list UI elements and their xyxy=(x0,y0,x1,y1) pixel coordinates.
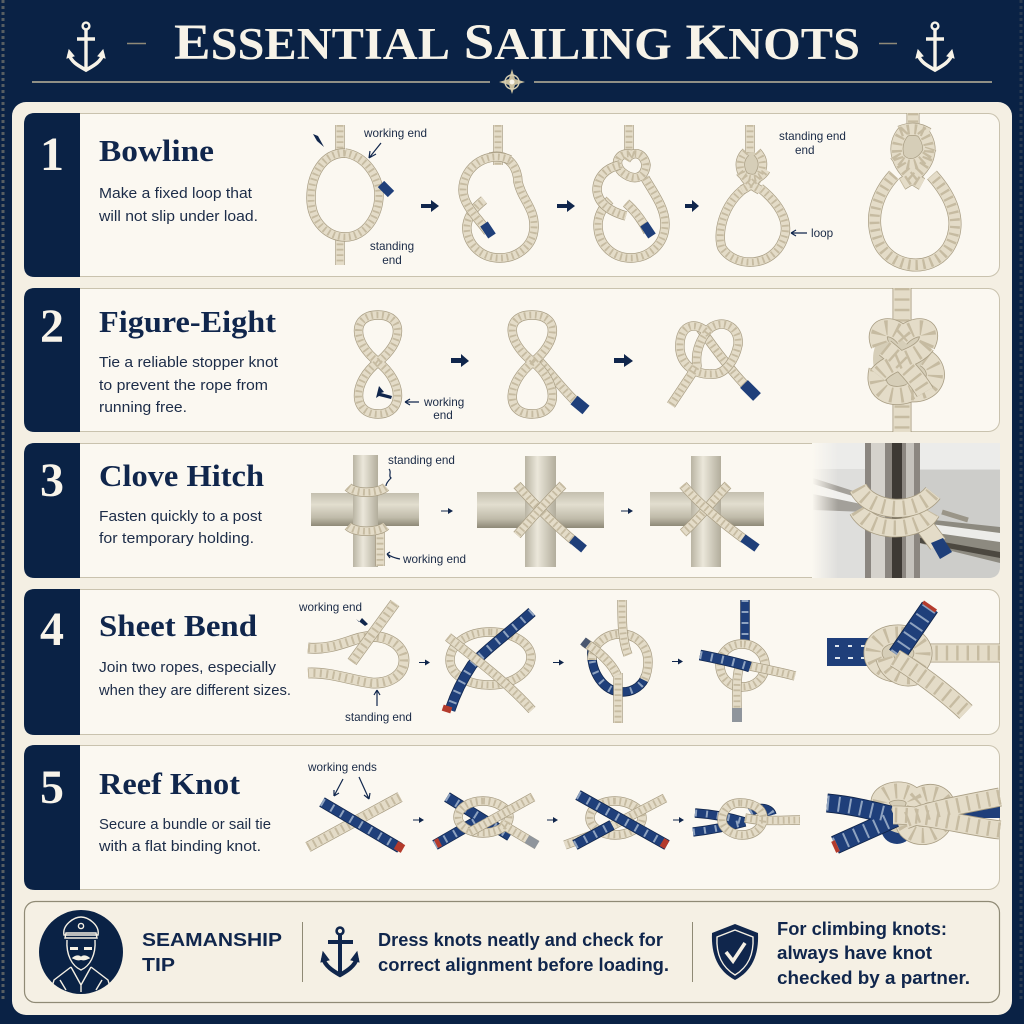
tip text: climbing knots: always have knot xyxy=(777,942,932,963)
panel: row 1 bowline xyxy=(24,113,1000,277)
tip text: climbing knots: For climbing knots: xyxy=(777,918,947,939)
icon: captain portrait xyxy=(39,910,123,994)
step 4 rope: standing end xyxy=(779,130,846,143)
step 2 post and rope xyxy=(477,456,604,567)
arrow xyxy=(419,660,430,666)
number tab 1 xyxy=(24,113,80,277)
panel: row 2 figure-eight xyxy=(24,288,1000,432)
panel: row 4 sheet bend xyxy=(24,589,1000,735)
step 5 finished knot xyxy=(875,113,955,265)
icon: shield check xyxy=(712,924,758,980)
arrow xyxy=(614,354,633,367)
arrow xyxy=(685,200,699,212)
description: Make a fixed loop that xyxy=(99,185,253,202)
step 1 ropes: standing end xyxy=(345,711,412,724)
tip text: dress knots: correct alignment before loading. xyxy=(378,954,669,975)
number tab 4 xyxy=(24,589,80,735)
step 1 ropes xyxy=(307,761,403,849)
icon: compass wheel xyxy=(499,69,525,94)
step 4 rope: loop xyxy=(811,227,834,240)
icon: right anchor xyxy=(916,23,954,70)
icon: anchor xyxy=(321,928,359,975)
arrow xyxy=(672,658,683,664)
heading: Bowline: Bowline xyxy=(99,133,214,168)
finished figure-eight knot xyxy=(873,288,935,432)
arrow xyxy=(451,354,469,367)
heading: Sheet Bend: Sheet Bend xyxy=(99,608,257,643)
heading: Figure-Eight: Figure-Eight xyxy=(99,304,277,339)
finished reef knot xyxy=(827,790,1000,852)
step 1 rope xyxy=(311,125,427,267)
step 1 ropes: working end xyxy=(298,601,362,614)
step 2 ropes xyxy=(435,797,537,845)
arrow xyxy=(441,508,453,514)
arrow xyxy=(547,817,558,823)
step 4 rope xyxy=(720,125,846,262)
step 1 rope xyxy=(358,315,464,422)
description: when they are different sizes. xyxy=(98,682,291,699)
step 2 rope xyxy=(512,315,586,414)
number tab 5 xyxy=(24,745,80,890)
arrow xyxy=(557,200,575,212)
arrow xyxy=(553,660,564,666)
step 1 post and rope: working end xyxy=(402,553,466,566)
description: will not slip under load. xyxy=(98,208,258,225)
title: ESSENTIAL SAILING KNOTS xyxy=(174,15,860,71)
number tab 2 xyxy=(24,288,80,432)
tip text: dress knots: Dress knots neatly and check for xyxy=(378,929,663,950)
step 1 rope: end xyxy=(433,409,453,422)
arrow xyxy=(621,508,633,514)
tip label: TIP xyxy=(142,954,175,975)
finished sheet bend xyxy=(827,602,1000,712)
step 2 ropes xyxy=(446,612,532,712)
arrow xyxy=(673,817,684,823)
arrow xyxy=(421,200,439,212)
arrow xyxy=(413,817,424,823)
step 1 ropes xyxy=(298,601,412,724)
number tab 3 xyxy=(24,443,80,578)
description: to prevent the rope from xyxy=(99,377,268,394)
description: Secure a bundle or sail tie xyxy=(99,816,271,833)
title dash ornaments xyxy=(127,42,897,44)
step 1 rope: working xyxy=(423,396,464,409)
description: Join two ropes, especially xyxy=(99,659,277,676)
title rule xyxy=(32,81,992,83)
number tab 1: 1 xyxy=(40,128,64,181)
description: Fasten quickly to a post xyxy=(99,508,263,525)
step 1 rope: working end xyxy=(363,127,427,140)
step 2 rope xyxy=(463,125,534,258)
tip label: SEAMANSHIP xyxy=(142,929,282,950)
step 4 ropes xyxy=(700,600,795,722)
panel: seamanship tip xyxy=(24,902,1000,1002)
panel: row 5 reef knot xyxy=(24,745,1000,890)
number tab 4: 4 xyxy=(40,603,64,656)
step 1 ropes: working ends xyxy=(307,761,377,774)
description: Tie a reliable stopper knot xyxy=(99,354,279,371)
step 1 rope: standing xyxy=(370,240,414,253)
panel: row 3 clove hitch xyxy=(24,443,1000,578)
step 3 ropes xyxy=(583,600,648,723)
step 1 post and rope xyxy=(311,454,466,567)
number tab 3: 3 xyxy=(40,454,64,507)
description: with a flat binding knot. xyxy=(98,838,261,855)
step 1 rope: end xyxy=(382,254,402,267)
heading: Reef Knot: Reef Knot xyxy=(99,766,241,801)
heading: Clove Hitch: Clove Hitch xyxy=(99,458,264,493)
step 4 ropes xyxy=(693,803,800,835)
step 3 ropes xyxy=(565,795,667,845)
step 1 post and rope: standing end xyxy=(388,454,455,467)
description: for temporary holding. xyxy=(99,530,254,547)
number tab 5: 5 xyxy=(40,761,64,814)
step 3 rope xyxy=(671,324,757,405)
description: running free. xyxy=(99,399,187,416)
photo: clove hitch on rail xyxy=(812,443,1000,578)
number tab 2: 2 xyxy=(40,300,64,353)
tip text: climbing knots: checked by a partner. xyxy=(777,967,970,988)
step 3 post and rope xyxy=(650,456,764,567)
icon: left anchor xyxy=(67,23,105,70)
step 4 rope: end xyxy=(795,144,815,157)
step 3 rope xyxy=(597,125,665,258)
